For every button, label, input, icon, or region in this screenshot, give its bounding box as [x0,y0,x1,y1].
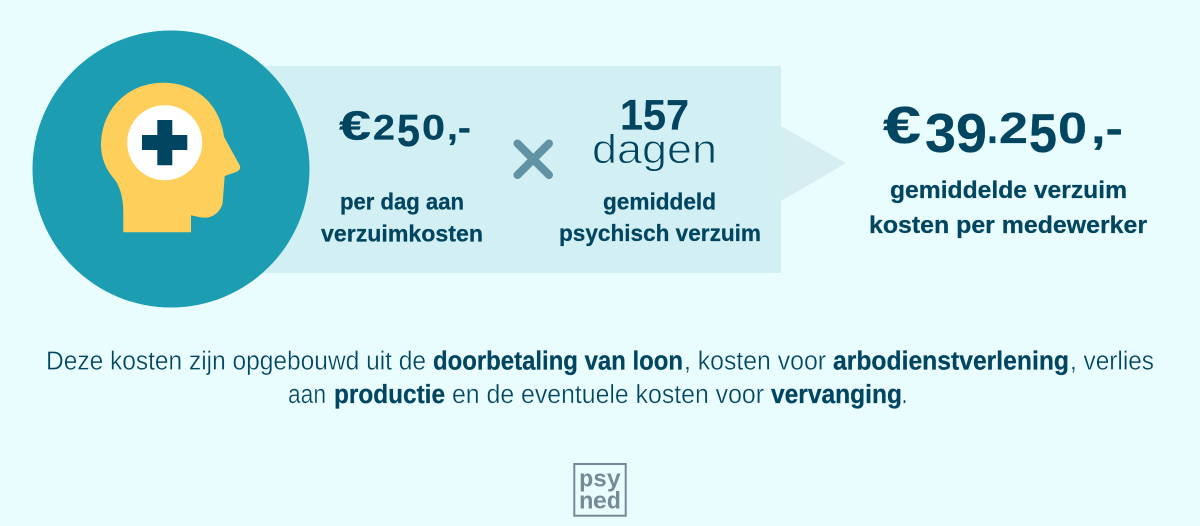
daily cost caption: verzuimkosten [321,220,483,246]
icon: head with medical cross [32,30,310,308]
explanatory paragraph: productie [334,381,445,409]
total cost amount: 39 [925,102,987,164]
daily cost amount: 5 [397,105,420,156]
total cost amount: 0 [1058,104,1087,153]
daily cost caption: per dag aan [340,188,464,214]
icon: multiply sign [518,144,549,175]
daily cost amount: 0 [422,108,445,148]
days unit: dagen [592,126,717,172]
explanatory paragraph: vervanging [771,381,902,409]
total cost caption [869,177,1147,239]
logo: psyned [574,464,626,516]
total cost amount: 5 [1029,102,1057,164]
explanatory paragraph: . [902,381,907,409]
explanatory paragraph: Deze kosten zijn opgebouwd uit de [46,348,426,376]
logo: psyned: ned [579,489,621,516]
total cost amount: ,- [1091,104,1123,153]
days caption [559,188,761,246]
logo: psyned: psy [579,468,621,494]
total cost amount: 2 [999,104,1028,153]
arrow: pointer to result [781,126,846,201]
daily cost amount: ,- [447,108,471,148]
explanatory paragraph: , kosten voor [684,348,826,376]
daily cost amount: € [339,102,371,148]
explanatory paragraph: , verlies [1070,348,1154,376]
days caption: gemiddeld [603,188,716,214]
days number: 157 [620,92,689,140]
total cost amount: . [987,104,998,153]
total cost caption: kosten per medewerker [869,212,1147,239]
explanatory paragraph: en de eventuele kosten voor [452,381,764,409]
explanatory paragraph: doorbetaling van loon [433,348,683,376]
panel: calculation band [170,66,781,273]
daily cost amount: 2 [373,108,395,148]
total cost amount: € [883,97,921,155]
explanatory paragraph [46,348,1154,409]
explanatory paragraph: aan [288,381,326,409]
daily cost caption [321,188,483,246]
total cost caption: gemiddelde verzuim [890,177,1127,204]
days caption: psychisch verzuim [559,220,761,246]
explanatory paragraph: arbodienstverlening [833,348,1069,376]
